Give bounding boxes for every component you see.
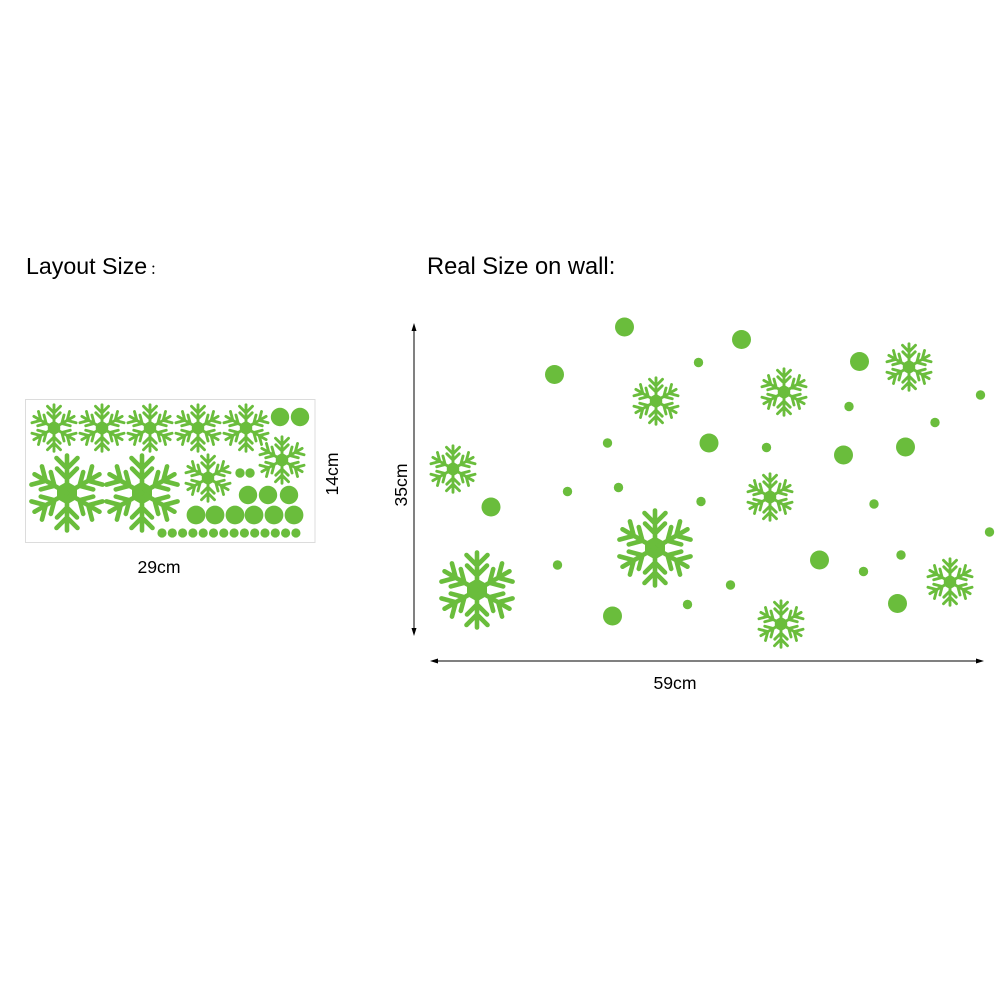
panel: layout sheet	[26, 400, 315, 542]
heading: layout size: Layout Size：	[26, 253, 163, 279]
wall dots	[482, 318, 994, 626]
label: 14cm height: 14cm	[322, 452, 342, 496]
panel: wall arrangement	[430, 318, 994, 647]
label: 29cm width: 29cm	[137, 557, 181, 577]
layout snowflakes	[29, 405, 305, 530]
label: 35cm height: 35cm	[391, 463, 411, 507]
label: 59cm width: 59cm	[653, 673, 697, 693]
layout dots	[157, 408, 309, 538]
arrow: vertical 35cm	[412, 323, 416, 636]
arrow: horizontal 59cm	[430, 658, 984, 664]
heading: real size on wall: Real Size on wall:	[427, 254, 615, 280]
wall snowflakes	[430, 344, 973, 647]
